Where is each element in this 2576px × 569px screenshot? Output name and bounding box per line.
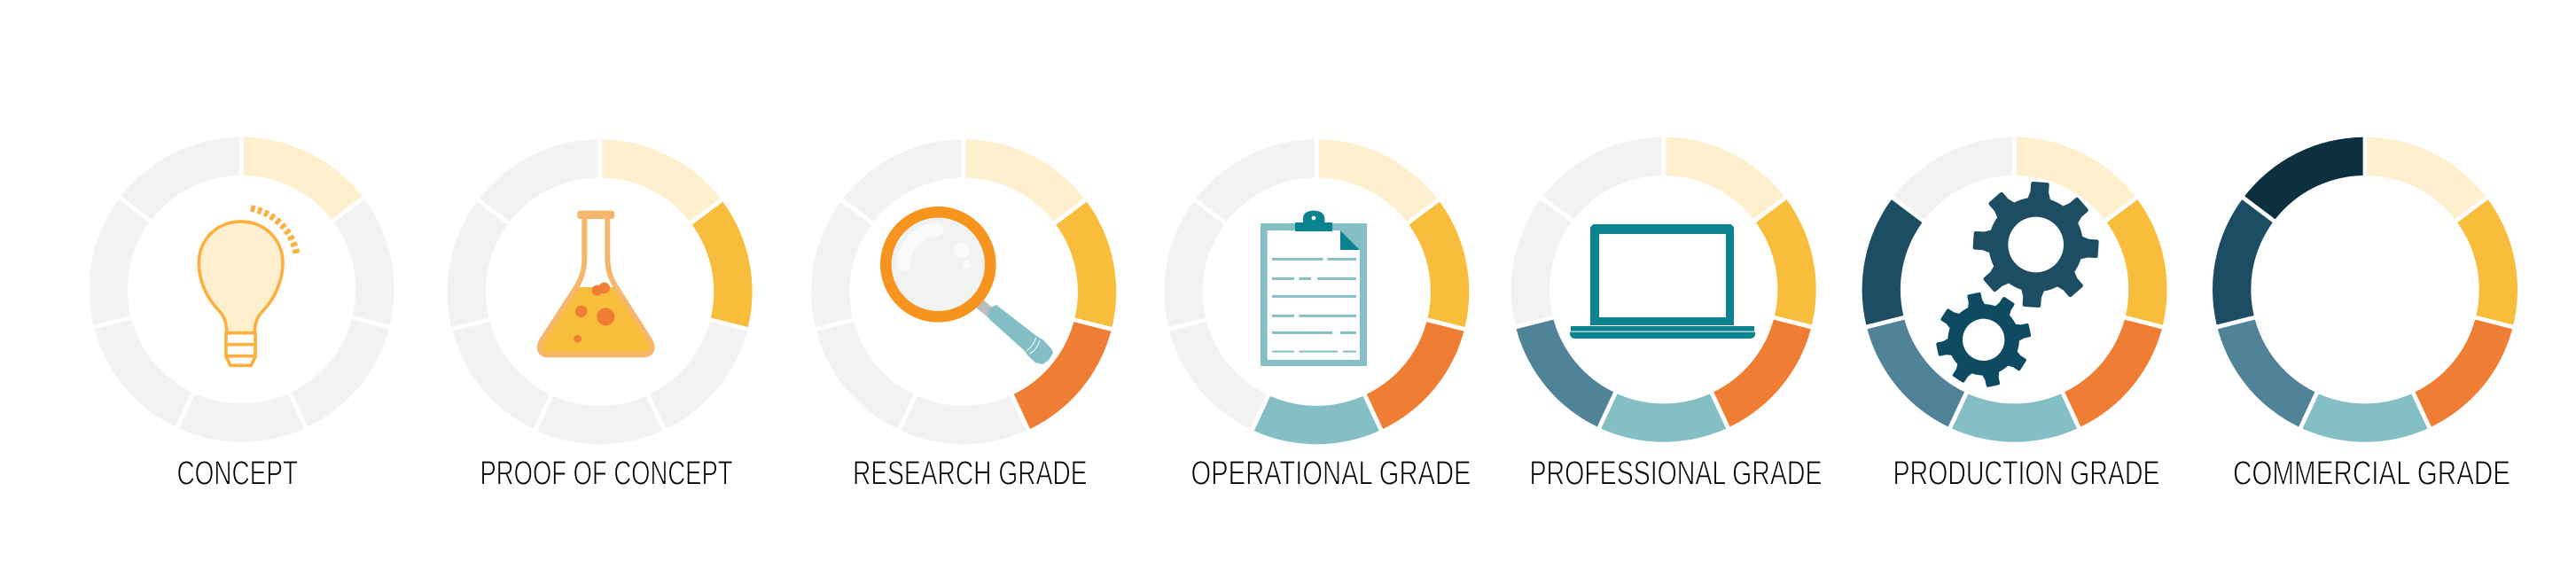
label: proof of concept: PROOF OF CONCEPT [480, 456, 732, 493]
panel: commercial grade [2213, 137, 2517, 492]
label: concept: CONCEPT [177, 456, 298, 493]
icon: flask [540, 211, 652, 355]
ring: 5 of 7 segments [1511, 137, 1816, 442]
icon: gears [1927, 178, 2103, 396]
ring: 6 of 7 segments [1862, 137, 2167, 442]
ring: 1 of 7 segments [90, 137, 394, 442]
panel: operational grade [1164, 139, 1471, 492]
ring: 2 of 7 segments [448, 139, 753, 444]
ring: 7 of 7 segments [2213, 137, 2517, 442]
ring: 4 of 7 segments [1164, 139, 1469, 444]
panel: concept [90, 137, 394, 492]
label: research grade: RESEARCH GRADE [853, 456, 1087, 493]
panel: research grade [811, 139, 1116, 492]
icon: light bulb [199, 208, 297, 365]
icon: laptop [1570, 224, 1755, 339]
label: operational grade: OPERATIONAL GRADE [1191, 456, 1471, 493]
label: professional grade: PROFESSIONAL GRADE [1530, 456, 1823, 493]
icon: magnifying glass [886, 212, 1053, 364]
panel: production grade [1862, 137, 2167, 492]
panel: professional grade [1511, 137, 1823, 492]
ring: 3 of 7 segments [811, 139, 1116, 444]
label: production grade: PRODUCTION GRADE [1893, 456, 2159, 493]
icon: clipboard [1261, 211, 1367, 366]
panel: proof of concept [448, 139, 753, 492]
